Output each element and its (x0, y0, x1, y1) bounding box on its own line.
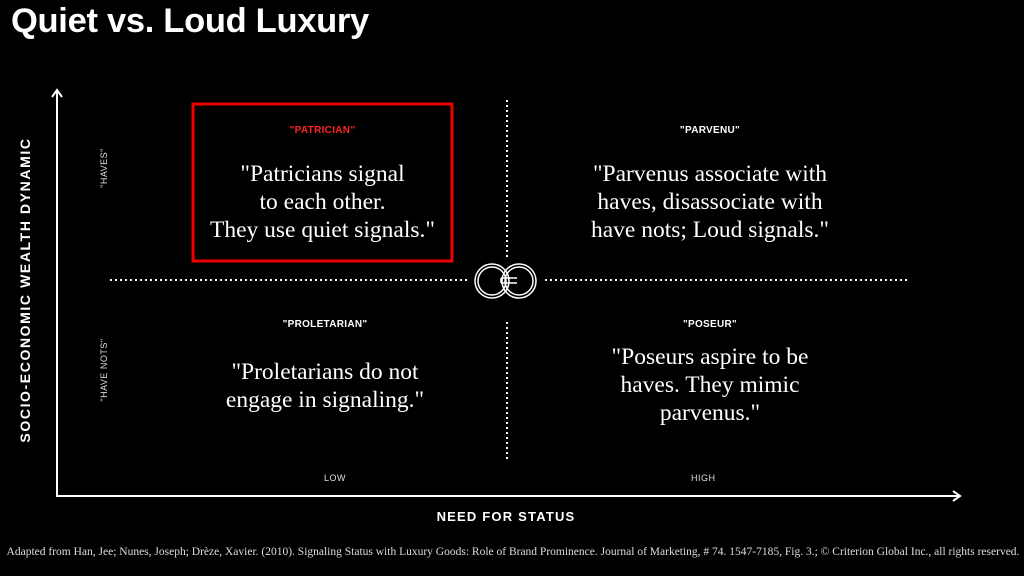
quadrant: patrician (210, 125, 435, 243)
x high label: HIGH (691, 473, 716, 483)
quadrant: patrician: They use quiet signals." (210, 217, 435, 243)
quadrant: poseur: parvenus." (660, 400, 760, 426)
x low label: LOW (324, 473, 346, 483)
footnote: Adapted from Han, Jee; Nunes, Joseph; Drèze, Xavier. (2010). Signaling Status with Luxury Goods: Role of Brand Prominence. Journal of Marketing, # 74. 1547-7185, Fig. 3.; © Criterion Global Inc., all rights reserved. (7, 546, 1019, 558)
x axis label: NEED FOR STATUS (437, 509, 575, 524)
quadrant: parvenu: "Parvenus associate with (593, 161, 827, 187)
quadrant: patrician: "PATRICIAN" (290, 125, 355, 136)
quadrant: parvenu: "PARVENU" (680, 125, 740, 136)
quadrant: poseur: haves. They mimic (620, 372, 800, 398)
quadrant: parvenu: have nots; Loud signals." (591, 217, 829, 243)
quadrant: parvenu: haves, disassociate with (597, 189, 823, 215)
quadrant: proletarian: "PROLETARIAN" (283, 319, 367, 330)
have nots label: "HAVE NOTS" (99, 338, 109, 402)
quadrant: proletarian (226, 319, 424, 413)
quadrant: parvenu (591, 125, 829, 243)
quadrant: patrician: "Patricians signal (240, 161, 405, 187)
quadrant: poseur: "Poseurs aspire to be (612, 344, 808, 370)
title: Quiet vs. Loud Luxury (11, 2, 369, 40)
quadrant: poseur: "POSEUR" (683, 319, 737, 330)
haves label: "HAVES" (99, 148, 109, 188)
icon: logo (475, 264, 536, 298)
quadrant: proletarian: engage in signaling." (226, 387, 424, 413)
quadrant: proletarian: "Proletarians do not (231, 359, 419, 385)
quadrant: poseur (612, 319, 808, 426)
y axis label: SOCIO-ECONOMIC WEALTH DYNAMIC (17, 137, 33, 443)
quadrant: patrician: to each other. (260, 189, 385, 215)
